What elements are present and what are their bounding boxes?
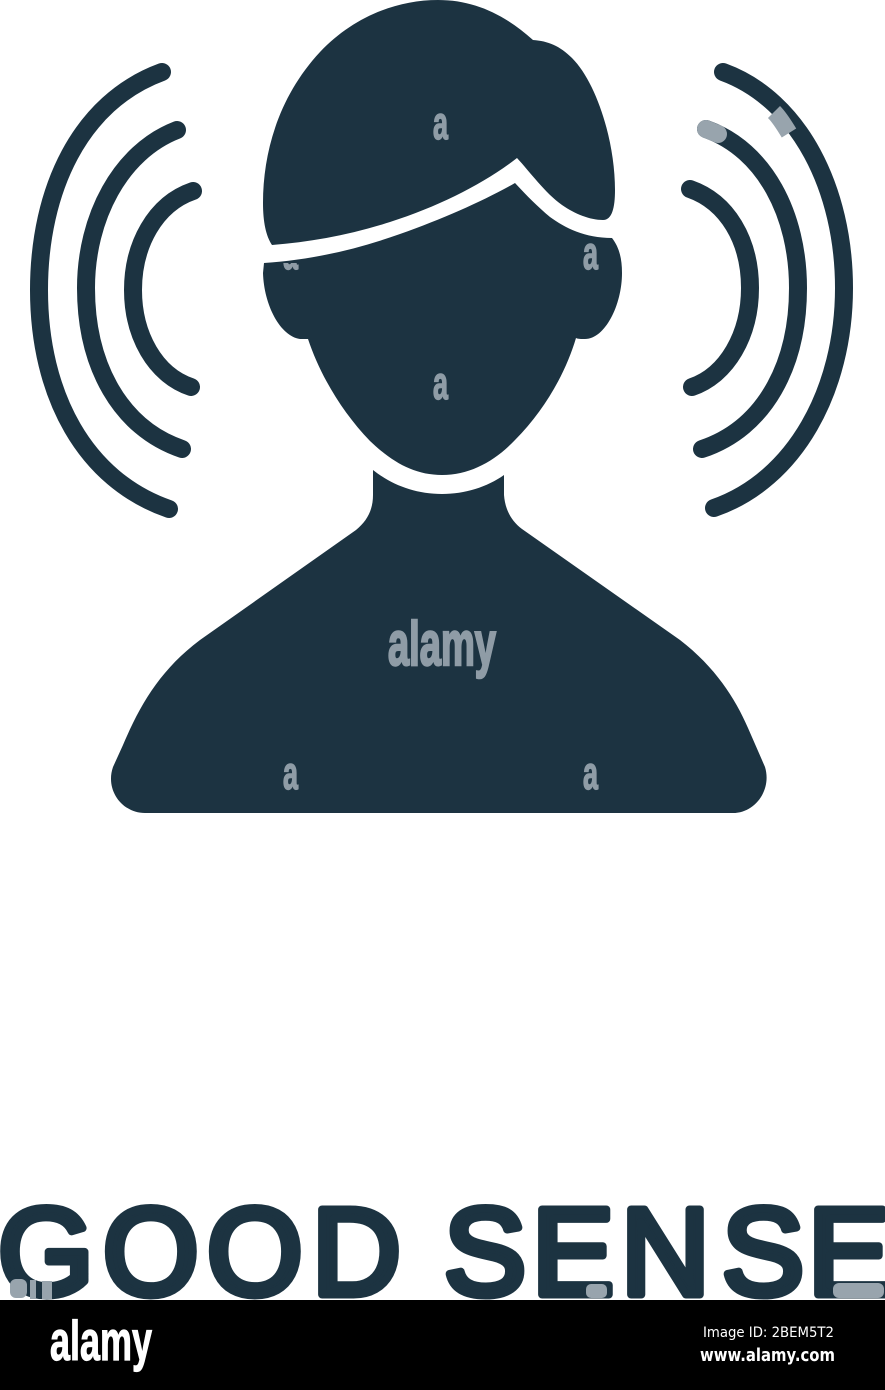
watermark: alamy letters on icon: a [583, 747, 598, 799]
title: GOOD SENSE [0, 1184, 885, 1322]
head [263, 183, 622, 475]
watermark: alamy letters on icon: a [433, 97, 448, 149]
image id: Image ID: 2BEM5T2 [703, 1325, 834, 1341]
watermark: alamy letters on icon: a [433, 357, 448, 409]
hair [263, 0, 615, 245]
watermark: alamy letters on icon: a [283, 747, 298, 799]
watermark: alamy letters on icon: a [283, 227, 298, 279]
website: www.alamy.com [700, 1345, 835, 1366]
watermark: fragments on waves [706, 112, 789, 134]
watermark: alamy letters on icon: alamy [388, 610, 496, 679]
icon: left sense waves [39, 72, 193, 509]
icon: right sense waves [690, 72, 844, 508]
watermark: alamy letters on icon: a [583, 227, 598, 279]
footer band [0, 1300, 885, 1390]
icon: person with sense waves [39, 0, 844, 813]
neck and shoulders [111, 470, 767, 813]
watermark: alamy letters on icon [283, 97, 598, 799]
footer logo: alamy [50, 1309, 152, 1372]
watermark: fragments on title [10, 1279, 884, 1299]
